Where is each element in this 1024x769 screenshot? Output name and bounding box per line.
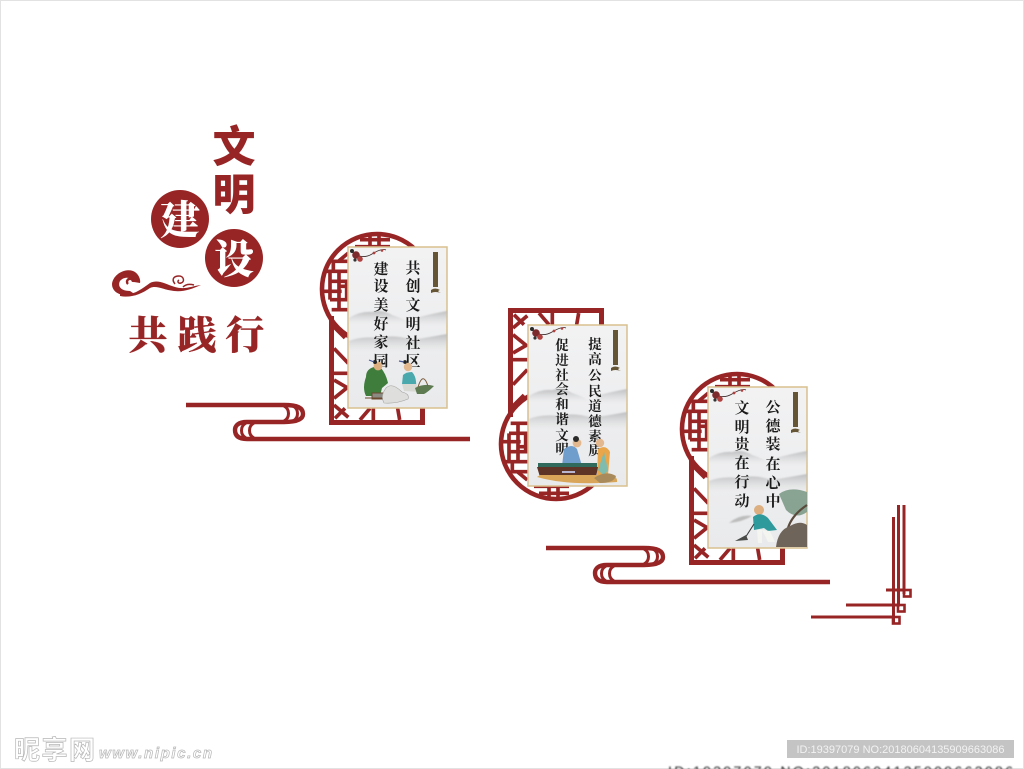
panel: card 1 [348,247,447,408]
slogan: 共创文明社区: 创 [405,277,421,295]
slogan: 公德装在心中: 装 [765,435,781,453]
circle badge 设 [205,229,263,287]
slogan: 公德装在心中: 在 [765,455,781,473]
subtitle 共践行: 践 [177,315,217,358]
slogan: 文明贵在行动: 明 [734,419,750,436]
slogan: 促进社会和谐文明: 明 [555,442,569,457]
slogan: 文明贵在行动: 文 [734,400,750,417]
slogan: 促进社会和谐文明: 会 [555,381,569,397]
slogan: 建设美好家园 [373,260,389,370]
illustration: sweeper beside pine tree [729,489,807,547]
slogan: 公德装在心中 [765,400,782,510]
slogan: 提高公民道德素质: 质 [588,442,602,458]
slogan: 促进社会和谐文明 [555,337,569,457]
icon: auspicious cloud [112,270,201,297]
heading characters 文明: 文 [212,124,256,172]
slogan: 建设美好家园: 好 [373,315,389,333]
slogan: 公德装在心中: 心 [765,475,782,492]
slogan: 提高公民道德素质: 高 [588,351,602,367]
slogan: 共创文明社区 [405,260,421,370]
slogan: 促进社会和谐文明: 和 [555,397,569,412]
circle badge 设: 设 [214,237,254,282]
slogan: 促进社会和谐文明: 谐 [555,411,569,427]
slogan: 公德装在心中: 中 [765,493,781,510]
watermark: ID box [787,740,1014,758]
slogan: 建设美好家园: 设 [373,278,389,295]
watermark: site logo: www.nipic.cn [99,745,212,762]
decoration: wave line 2 [546,548,830,582]
watermark: site logo [14,735,212,765]
watermark: site logo: 昵享网 [14,735,95,765]
slogan: 促进社会和谐文明: 社 [555,367,569,383]
panel: lattice frame 1 [322,233,432,422]
circle badge 建 [151,190,209,248]
subtitle 共践行 [128,315,265,358]
heading characters 文明 [212,124,256,220]
slogan: 文明贵在行动: 贵 [734,435,751,453]
slogan: 提高公民道德素质: 公 [588,368,602,383]
decoration: corner lattice lines [811,505,910,624]
panel: card 3 [708,387,807,548]
slogan: 建设美好家园: 园 [373,353,389,370]
illustration: two children with lamb [364,360,434,403]
slogan: 共创文明社区: 共 [405,260,421,277]
slogan: 提高公民道德素质: 民 [588,384,602,399]
slogan: 提高公民道德素质: 道 [588,398,602,414]
slogan: 提高公民道德素质: 素 [588,428,602,444]
slogan: 共创文明社区: 区 [405,353,421,370]
watermark: ID box: ID:19397079 NO:20180604135909663086 [796,744,1004,756]
slogan: 建设美好家园: 家 [373,333,389,351]
heading characters 文明: 明 [212,172,256,220]
slogan: 提高公民道德素质 [588,336,603,458]
slogan: 提高公民道德素质: 德 [588,413,603,429]
panel: card 2 [528,325,627,486]
slogan: 文明贵在行动: 行 [734,474,750,491]
illustration: two figures at desk [537,436,617,483]
circle badge 建: 建 [160,198,200,243]
slogan: 文明贵在行动 [734,400,751,510]
subtitle 共践行: 共 [128,315,169,358]
slogan: 促进社会和谐文明: 文 [555,428,569,443]
title: 文明建设共践行 [112,124,265,358]
panel: lattice frame 3 [682,373,792,562]
slogan: 文明贵在行动: 动 [734,492,750,510]
slogan: 文明贵在行动: 在 [734,454,750,472]
panel: lattice frame 2 [501,310,611,500]
slogan: 公德装在心中: 公 [765,400,781,416]
slogan: 共创文明社区: 明 [405,316,421,333]
slogan: 建设美好家园: 建 [373,260,389,278]
slogan: 公德装在心中: 德 [765,417,781,435]
decoration: wave line 1 [186,405,470,439]
slogan: 提高公民道德素质: 提 [588,336,602,352]
slogan: 促进社会和谐文明: 促 [555,337,569,353]
slogan: 共创文明社区: 社 [405,335,421,352]
slogan: 促进社会和谐文明: 进 [555,352,569,368]
slogan: 建设美好家园: 美 [373,296,389,314]
subtitle 共践行: 行 [225,315,265,358]
slogan: 共创文明社区: 文 [405,297,421,314]
